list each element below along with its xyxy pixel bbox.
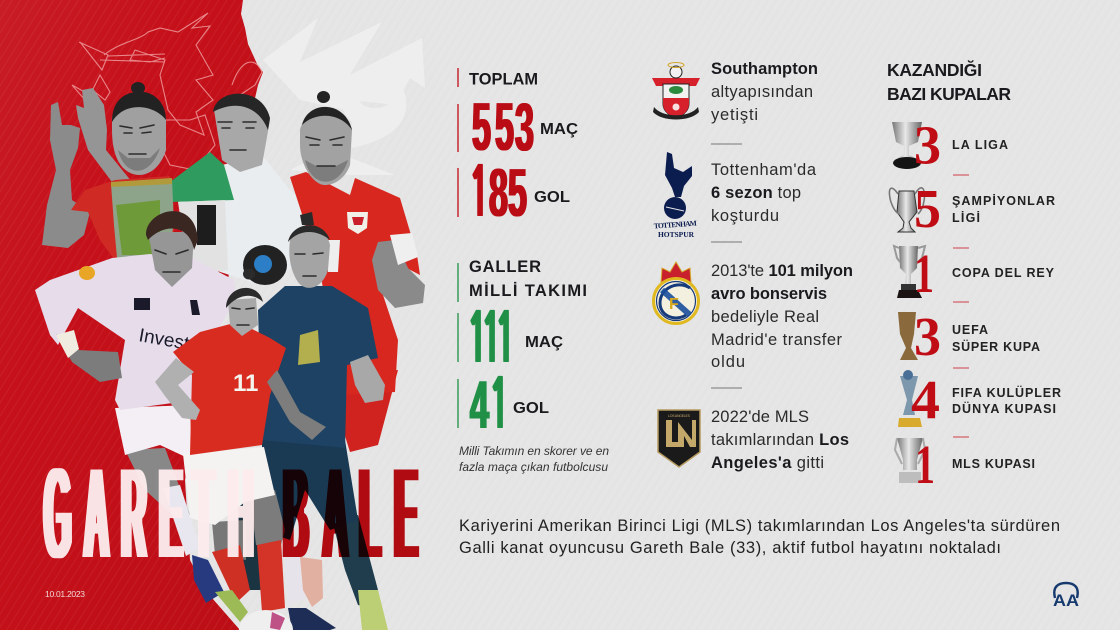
player: Wales number 11: [155, 268, 336, 630]
date: 10.01.2023: [45, 589, 85, 599]
red torn panel: [0, 0, 263, 630]
europa patch: [79, 266, 95, 280]
icon: trophy: [894, 246, 925, 298]
title: Bale: BALE: [283, 439, 417, 588]
panel: trophies heading: BAZI KUPALAR: [887, 84, 1011, 104]
number 553: 553: [472, 89, 534, 165]
trophy held by player: [111, 178, 174, 258]
trophy row: FIFA Club World Cup: [898, 369, 1061, 430]
number 185: 8: [489, 155, 508, 231]
face features: [120, 125, 154, 154]
count: 1: [915, 434, 935, 495]
face features: [232, 308, 254, 325]
right arm: [267, 370, 326, 440]
hair: [288, 212, 330, 242]
hair: [146, 211, 198, 250]
left leg: [212, 520, 246, 560]
shorts: [183, 447, 275, 525]
under armour mark: [134, 298, 150, 310]
label: MLS KUPASI: [952, 457, 1035, 471]
logo: Real Madrid: [654, 262, 698, 324]
Real Madrid text: avro bonservis: [711, 285, 827, 303]
number 185: 5: [508, 155, 527, 231]
panel: total stats: [458, 68, 578, 231]
Tottenham text: Tottenham'da: [711, 161, 817, 179]
panel: trophies heading: KAZANDIĞI: [887, 59, 982, 80]
number 111: 111: [467, 306, 516, 373]
shorts: [340, 370, 398, 452]
panel: career timeline: [711, 60, 853, 472]
heading: GALLER: [469, 258, 541, 276]
Southampton text: [711, 60, 818, 124]
count: 4: [911, 369, 940, 430]
Real Madrid text: oldu: [711, 353, 745, 371]
label: GOL: [513, 400, 549, 417]
wristband: [56, 330, 79, 358]
white flag: [178, 155, 306, 285]
player: with flag and scarf: [170, 94, 306, 285]
number 41: 1: [489, 372, 510, 439]
trophy row: Copa del Rey: [894, 243, 1055, 304]
player: Real Madrid: [238, 212, 388, 630]
head: [300, 111, 352, 185]
logo: Tottenham Hotspur: [654, 152, 697, 239]
count: 5: [914, 178, 941, 239]
football: [239, 610, 293, 630]
title: Gareth: GARETH: [44, 439, 253, 588]
face features: [306, 137, 344, 166]
count: 3: [914, 306, 941, 367]
label: ŞAMPİYONLAR: [952, 193, 1055, 208]
shirt number: 11: [233, 370, 258, 397]
scarf: [178, 200, 228, 275]
label: SÜPER KUPA: [952, 339, 1040, 354]
summary text: Kariyerini Amerikan Birinci Ligi (MLS) takımlarından Los Angeles'ta sürdüren: [459, 517, 1060, 535]
number 185: 1: [469, 160, 490, 227]
head: [289, 228, 330, 288]
label: MAÇ: [525, 334, 563, 351]
note: Milli Takımın en skorer ve en: [459, 444, 609, 458]
number 41: 4: [470, 367, 489, 443]
icon: trophy: [892, 122, 922, 169]
Tottenham text: [711, 161, 817, 225]
count: 3: [914, 114, 941, 176]
head: [112, 99, 166, 175]
arm: [372, 240, 425, 308]
shirt: [35, 254, 236, 410]
left arm and hand: [42, 102, 90, 248]
beard: [305, 160, 348, 182]
heading: MİLLİ TAKIMI: [469, 282, 587, 300]
trophy row: UEFA Super Cup: [898, 306, 1040, 367]
summary text: Galli kanat oyuncusu Gareth Bale (33), aktif futbol hayatını noktaladı: [459, 539, 1001, 557]
Real Madrid text: 2013'te 101 milyon: [711, 262, 853, 280]
shorts: [262, 438, 358, 540]
Real Madrid text: Madrid'e transfer: [711, 331, 842, 349]
logo: Los Angeles FC: [658, 410, 700, 467]
hair: [302, 91, 352, 130]
Los Angeles text: Angeles'a gitti: [711, 454, 824, 472]
hair: [112, 82, 166, 122]
badge: [347, 212, 368, 234]
red dragon outline: [72, 13, 262, 170]
Los Angeles text: [711, 408, 849, 472]
Los Angeles text: takımlarından Los: [711, 431, 849, 449]
logo: Tottenham Hotspur: HOTSPUR: [658, 230, 695, 239]
accent bars: [457, 263, 459, 428]
cockerel mark: [190, 300, 200, 315]
shirt: [71, 176, 176, 262]
right sock: [257, 540, 285, 612]
beard: [118, 148, 160, 171]
Southampton text: Southampton: [711, 60, 818, 78]
logo: Real Madrid: F: [669, 296, 679, 313]
heading: TOPLAM: [469, 70, 538, 88]
right boot: [288, 608, 336, 630]
label: FIFA KULÜPLER: [952, 385, 1061, 400]
back leg: [125, 448, 190, 520]
head: [148, 232, 194, 287]
Tottenham text: koşturdu: [711, 207, 779, 225]
sock: [163, 485, 200, 556]
label: LİGİ: [952, 210, 980, 225]
count: 1: [914, 243, 934, 304]
far boot: [300, 557, 323, 607]
arm and hand: [56, 334, 122, 382]
label: GOL: [534, 189, 570, 206]
note: fazla maça çıkan futbolcusu: [459, 460, 608, 474]
panel: Wales national team stats: [458, 258, 609, 474]
head: [228, 298, 258, 336]
shirt: [173, 322, 286, 455]
summary text: [459, 517, 1060, 557]
head: [214, 96, 270, 172]
left arm: [155, 358, 200, 420]
crest detail: [243, 245, 287, 285]
shirt: [258, 286, 378, 448]
left boot: [215, 590, 248, 622]
shorts: [115, 405, 192, 460]
Real Madrid text: bedeliyle Real: [711, 308, 819, 326]
white dragon watermark: [263, 18, 425, 175]
player: Tottenham: [35, 211, 323, 607]
green flag: [170, 152, 234, 202]
back leg: [238, 500, 262, 590]
accent bars: [457, 68, 459, 217]
icon: trophy: [898, 312, 918, 360]
logo: Tottenham Hotspur: TOTTENHAM: [654, 219, 697, 231]
hair: [213, 94, 270, 130]
panel: trophies heading: [887, 59, 1011, 104]
Southampton text: altyapısından: [711, 83, 813, 101]
player: Wales captain: [290, 91, 425, 452]
face features: [218, 122, 256, 150]
label: COPA DEL REY: [952, 266, 1055, 280]
label: LA LIGA: [952, 138, 1008, 152]
trophy row: La Liga: [892, 114, 1008, 176]
icon: trophy: [889, 188, 924, 232]
shirt number: [328, 240, 340, 272]
right arm and hand: [76, 88, 132, 190]
leg and sock: [332, 515, 380, 610]
number 41: [470, 367, 510, 443]
captain armband: [390, 233, 418, 265]
Anadolu Agency logo: [1053, 583, 1079, 610]
icon: trophy: [895, 438, 925, 483]
number 185: [469, 155, 527, 231]
player: Wales, waving: [42, 82, 176, 262]
icon: trophy: [898, 370, 922, 427]
arm: [350, 355, 385, 403]
boot: [192, 555, 224, 603]
trophy row: MLS Cup: [895, 434, 1035, 495]
left sock: [212, 545, 250, 603]
logo: Los Angeles FC: LOS ANGELES: [668, 414, 691, 418]
boot: [358, 590, 388, 630]
hair: [226, 268, 263, 308]
sponsor text: Invest: [137, 325, 191, 355]
logo: Southampton: [652, 62, 700, 120]
Southampton text: yetişti: [711, 106, 758, 124]
Tottenham text: 6 sezon top: [711, 184, 801, 202]
label: DÜNYA KUPASI: [952, 401, 1056, 416]
Los Angeles text: 2022'de MLS: [711, 408, 809, 426]
right leg: [250, 490, 285, 545]
label: MAÇ: [540, 121, 578, 138]
face features: [155, 250, 188, 272]
far sock: [285, 556, 305, 606]
Anadolu Agency logo: AA: [1053, 591, 1079, 610]
Real Madrid text: [711, 262, 853, 371]
label: UEFA: [952, 323, 988, 337]
shirt: [290, 172, 420, 395]
face features: [295, 253, 323, 276]
trophy row: Champions League: [889, 178, 1055, 239]
